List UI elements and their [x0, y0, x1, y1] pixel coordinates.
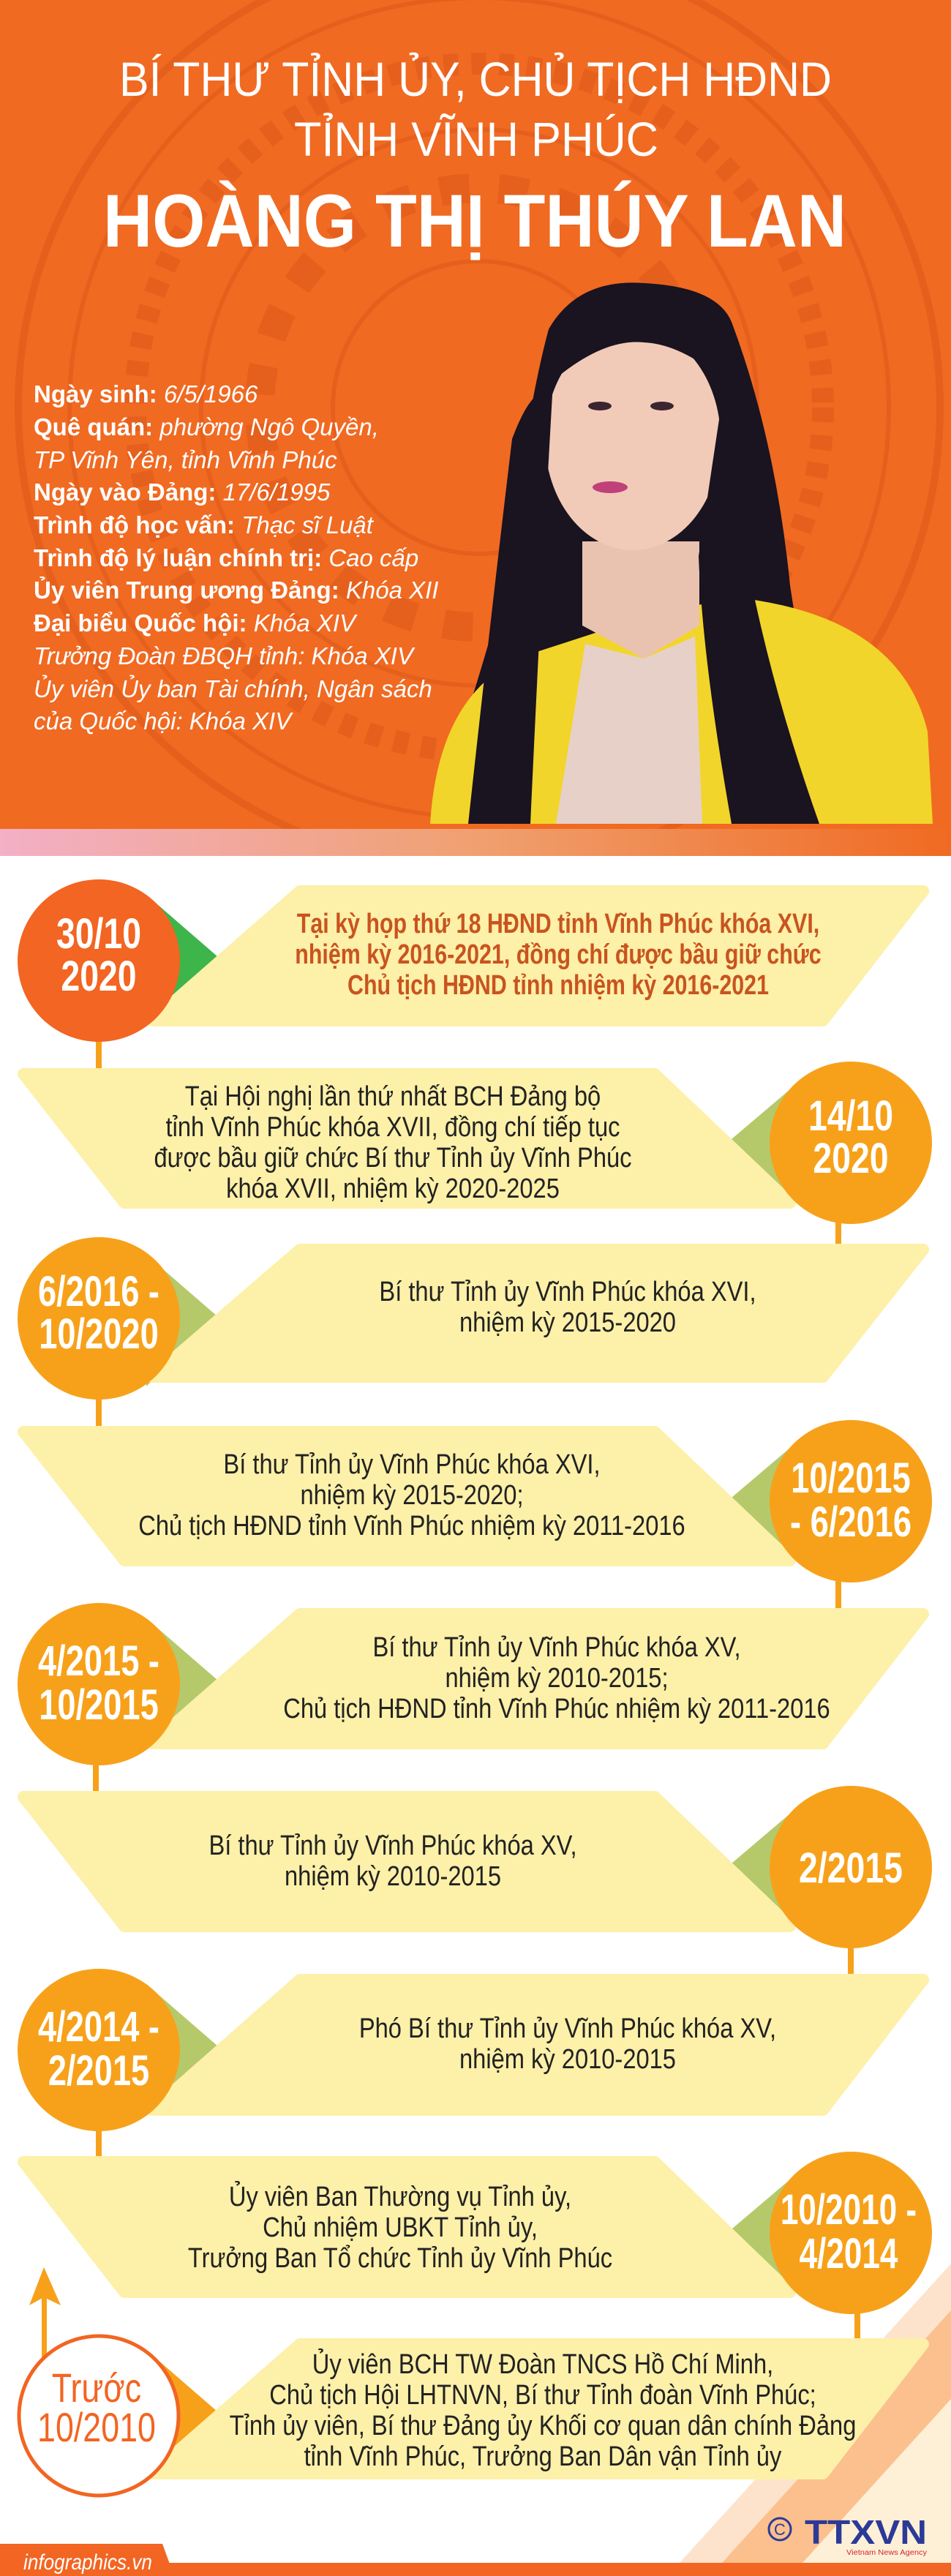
footer	[0, 2544, 951, 2576]
title: TỈNH VĨNH PHÚC	[294, 112, 658, 166]
title	[103, 52, 846, 263]
item 4: nhiệm kỳ 2015-2020;	[300, 1479, 524, 1511]
info block: Ngày vào Đảng: 17/6/1995	[34, 478, 331, 506]
item 3: Bí thư Tỉnh ủy Vĩnh Phúc khóa XVI,	[379, 1276, 756, 1307]
item 5: Bí thư Tỉnh ủy Vĩnh Phúc khóa XV,	[372, 1631, 741, 1663]
item 4: - 6/2016	[790, 1499, 911, 1546]
item 8	[23, 2152, 932, 2314]
info block: Trình độ học vấn: Thạc sĩ Luật	[34, 511, 375, 538]
item 2: khóa XVII, nhiệm kỳ 2020-2025	[226, 1173, 560, 1204]
item 7: Phó Bí thư Tỉnh ủy Vĩnh Phúc khóa XV,	[359, 2013, 776, 2044]
info block: của Quốc hội: Khóa XIV	[34, 707, 293, 735]
item 9: Trước	[52, 2365, 141, 2411]
item 1: Chủ tịch HĐND tỉnh nhiệm kỳ 2016-2021	[347, 970, 769, 1001]
arrow up	[29, 2267, 61, 2363]
info block: Đại biểu Quốc hội: Khóa XIV	[34, 609, 358, 637]
item 7	[18, 1969, 923, 2131]
item 1	[18, 879, 923, 1042]
item 5: nhiệm kỳ 2010-2015;	[445, 1662, 669, 1694]
item 8: Ủy viên Ban Thường vụ Tỉnh ủy,	[229, 2181, 571, 2212]
item 7: 4/2014 -	[38, 2004, 159, 2051]
item 1: Tại kỳ họp thứ 18 HĐND tỉnh Vĩnh Phúc khóa XVI,	[297, 909, 819, 939]
info block: Quê quán: phường Ngô Quyền,	[34, 413, 379, 440]
item 7: 2/2015	[48, 2048, 149, 2095]
item 2	[23, 1062, 932, 1224]
item 9: 10/2010	[37, 2404, 156, 2450]
item 5: Chủ tịch HĐND tỉnh Vĩnh Phúc nhiệm kỳ 2011-2016	[283, 1693, 830, 1724]
item 6	[23, 1786, 932, 1948]
logo TTXVN: TTXVN	[805, 2513, 927, 2551]
item 8: 4/2014	[800, 2229, 898, 2277]
item 3: nhiệm kỳ 2015-2020	[459, 1307, 676, 1338]
item 5	[18, 1603, 923, 1765]
item 6: 2/2015	[799, 1844, 903, 1892]
item 3	[18, 1237, 923, 1400]
item 3: 6/2016 -	[38, 1269, 159, 1315]
footer: infographics.vn	[23, 2550, 152, 2575]
info block: Ủy viên Ủy ban Tài chính, Ngân sách	[34, 675, 432, 702]
item 9	[19, 2336, 923, 2496]
item 9: Chủ tịch Hội LHTNVN, Bí thư Tỉnh đoàn Vĩnh Phúc;	[269, 2379, 816, 2411]
portrait	[430, 282, 933, 824]
item 8: 10/2010 -	[781, 2185, 917, 2233]
item 2: tỉnh Vĩnh Phúc khóa XVII, đồng chí tiếp tục	[165, 1111, 620, 1143]
title: BÍ THƯ TỈNH ỦY, CHỦ TỊCH HĐND	[119, 52, 832, 106]
item 1: 30/10	[56, 910, 141, 958]
item 8: Trưởng Ban Tổ chức Tỉnh ủy Vĩnh Phúc	[188, 2242, 612, 2274]
item 5: 4/2015 -	[38, 1638, 159, 1685]
item 2: 2020	[813, 1135, 889, 1182]
connectors	[93, 1039, 860, 2340]
header background	[0, 0, 951, 868]
item 2: được bầu giữ chức Bí thư Tỉnh ủy Vĩnh Phúc	[154, 1142, 632, 1174]
item 3: 10/2020	[39, 1311, 159, 1358]
item 2: Tại Hội nghị lần thứ nhất BCH Đảng bộ	[185, 1081, 601, 1112]
item 4: Chủ tịch HĐND tỉnh Vĩnh Phúc nhiệm kỳ 2011-2016	[138, 1510, 685, 1542]
item 9: Tỉnh ủy viên, Bí thư Đảng ủy Khối cơ quan dân chính Đảng	[230, 2410, 856, 2441]
item 9: Ủy viên BCH TW Đoàn TNCS Hồ Chí Minh,	[312, 2348, 773, 2380]
info block	[34, 380, 438, 735]
item 6: Bí thư Tỉnh ủy Vĩnh Phúc khóa XV,	[208, 1830, 577, 1861]
item 6: nhiệm kỳ 2010-2015	[285, 1860, 501, 1892]
item 9: tỉnh Vĩnh Phúc, Trưởng Ban Dân vận Tỉnh ủy	[304, 2441, 782, 2472]
info block: Ngày sinh: 6/5/1966	[34, 380, 258, 408]
item 1: nhiệm kỳ 2016-2021, đồng chí được bầu giữ chức	[295, 939, 822, 970]
item 1: 2020	[61, 953, 137, 1000]
info block: Trình độ lý luận chính trị: Cao cấp	[34, 544, 418, 571]
logo TTXVN: C	[774, 2520, 786, 2539]
logo TTXVN	[769, 2513, 927, 2557]
decorative stripes	[680, 2264, 951, 2563]
item 4: Bí thư Tỉnh ủy Vĩnh Phúc khóa XVI,	[223, 1449, 601, 1480]
info block: TP Vĩnh Yên, tỉnh Vĩnh Phúc	[34, 446, 337, 473]
item 4: 10/2015	[791, 1455, 911, 1502]
item 4	[23, 1420, 932, 1582]
title: HOÀNG THỊ THÚY LAN	[103, 179, 846, 263]
item 7: nhiệm kỳ 2010-2015	[459, 2043, 676, 2075]
info block: Trưởng Đoàn ĐBQH tỉnh: Khóa XIV	[34, 642, 416, 669]
item 2: 14/10	[808, 1092, 893, 1140]
item 5: 10/2015	[39, 1682, 159, 1729]
item 8: Chủ nhiệm UBKT Tỉnh ủy,	[263, 2212, 538, 2243]
logo TTXVN: Vietnam News Agency	[846, 2549, 927, 2557]
info block: Ủy viên Trung ương Đảng: Khóa XII	[34, 577, 438, 604]
